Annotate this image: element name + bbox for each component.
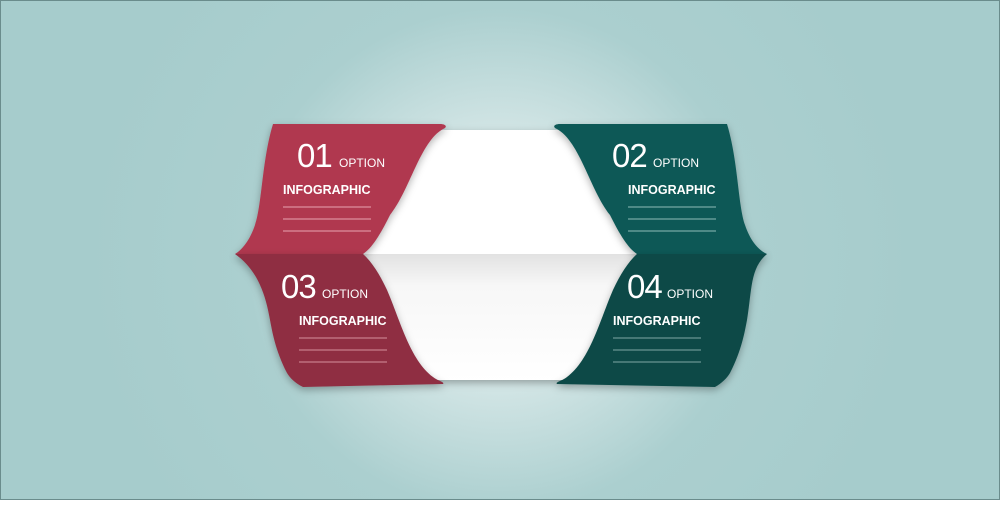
panel: option 01: 01 [297,137,332,174]
panel: option 02: INFOGRAPHIC [628,183,716,197]
panel: option 03: 03 [281,268,316,305]
white center panel [363,130,637,380]
panel: option 04 [557,254,767,387]
panel: option 03 [235,254,443,387]
panel: option 02 [554,124,767,254]
panel: option 03: OPTION [322,287,368,301]
panel: option 03: INFOGRAPHIC [299,314,386,328]
panel: option 01: OPTION [339,156,385,170]
panel: option 01: INFOGRAPHIC [283,183,370,197]
panel: option 04: OPTION [667,287,713,301]
panel: option 04: 04 [627,268,662,305]
panel: option 01 [235,124,446,254]
panel: option 02: 02 [612,137,647,174]
panel: option 04: INFOGRAPHIC [613,314,700,328]
panel: option 02: OPTION [653,156,699,170]
